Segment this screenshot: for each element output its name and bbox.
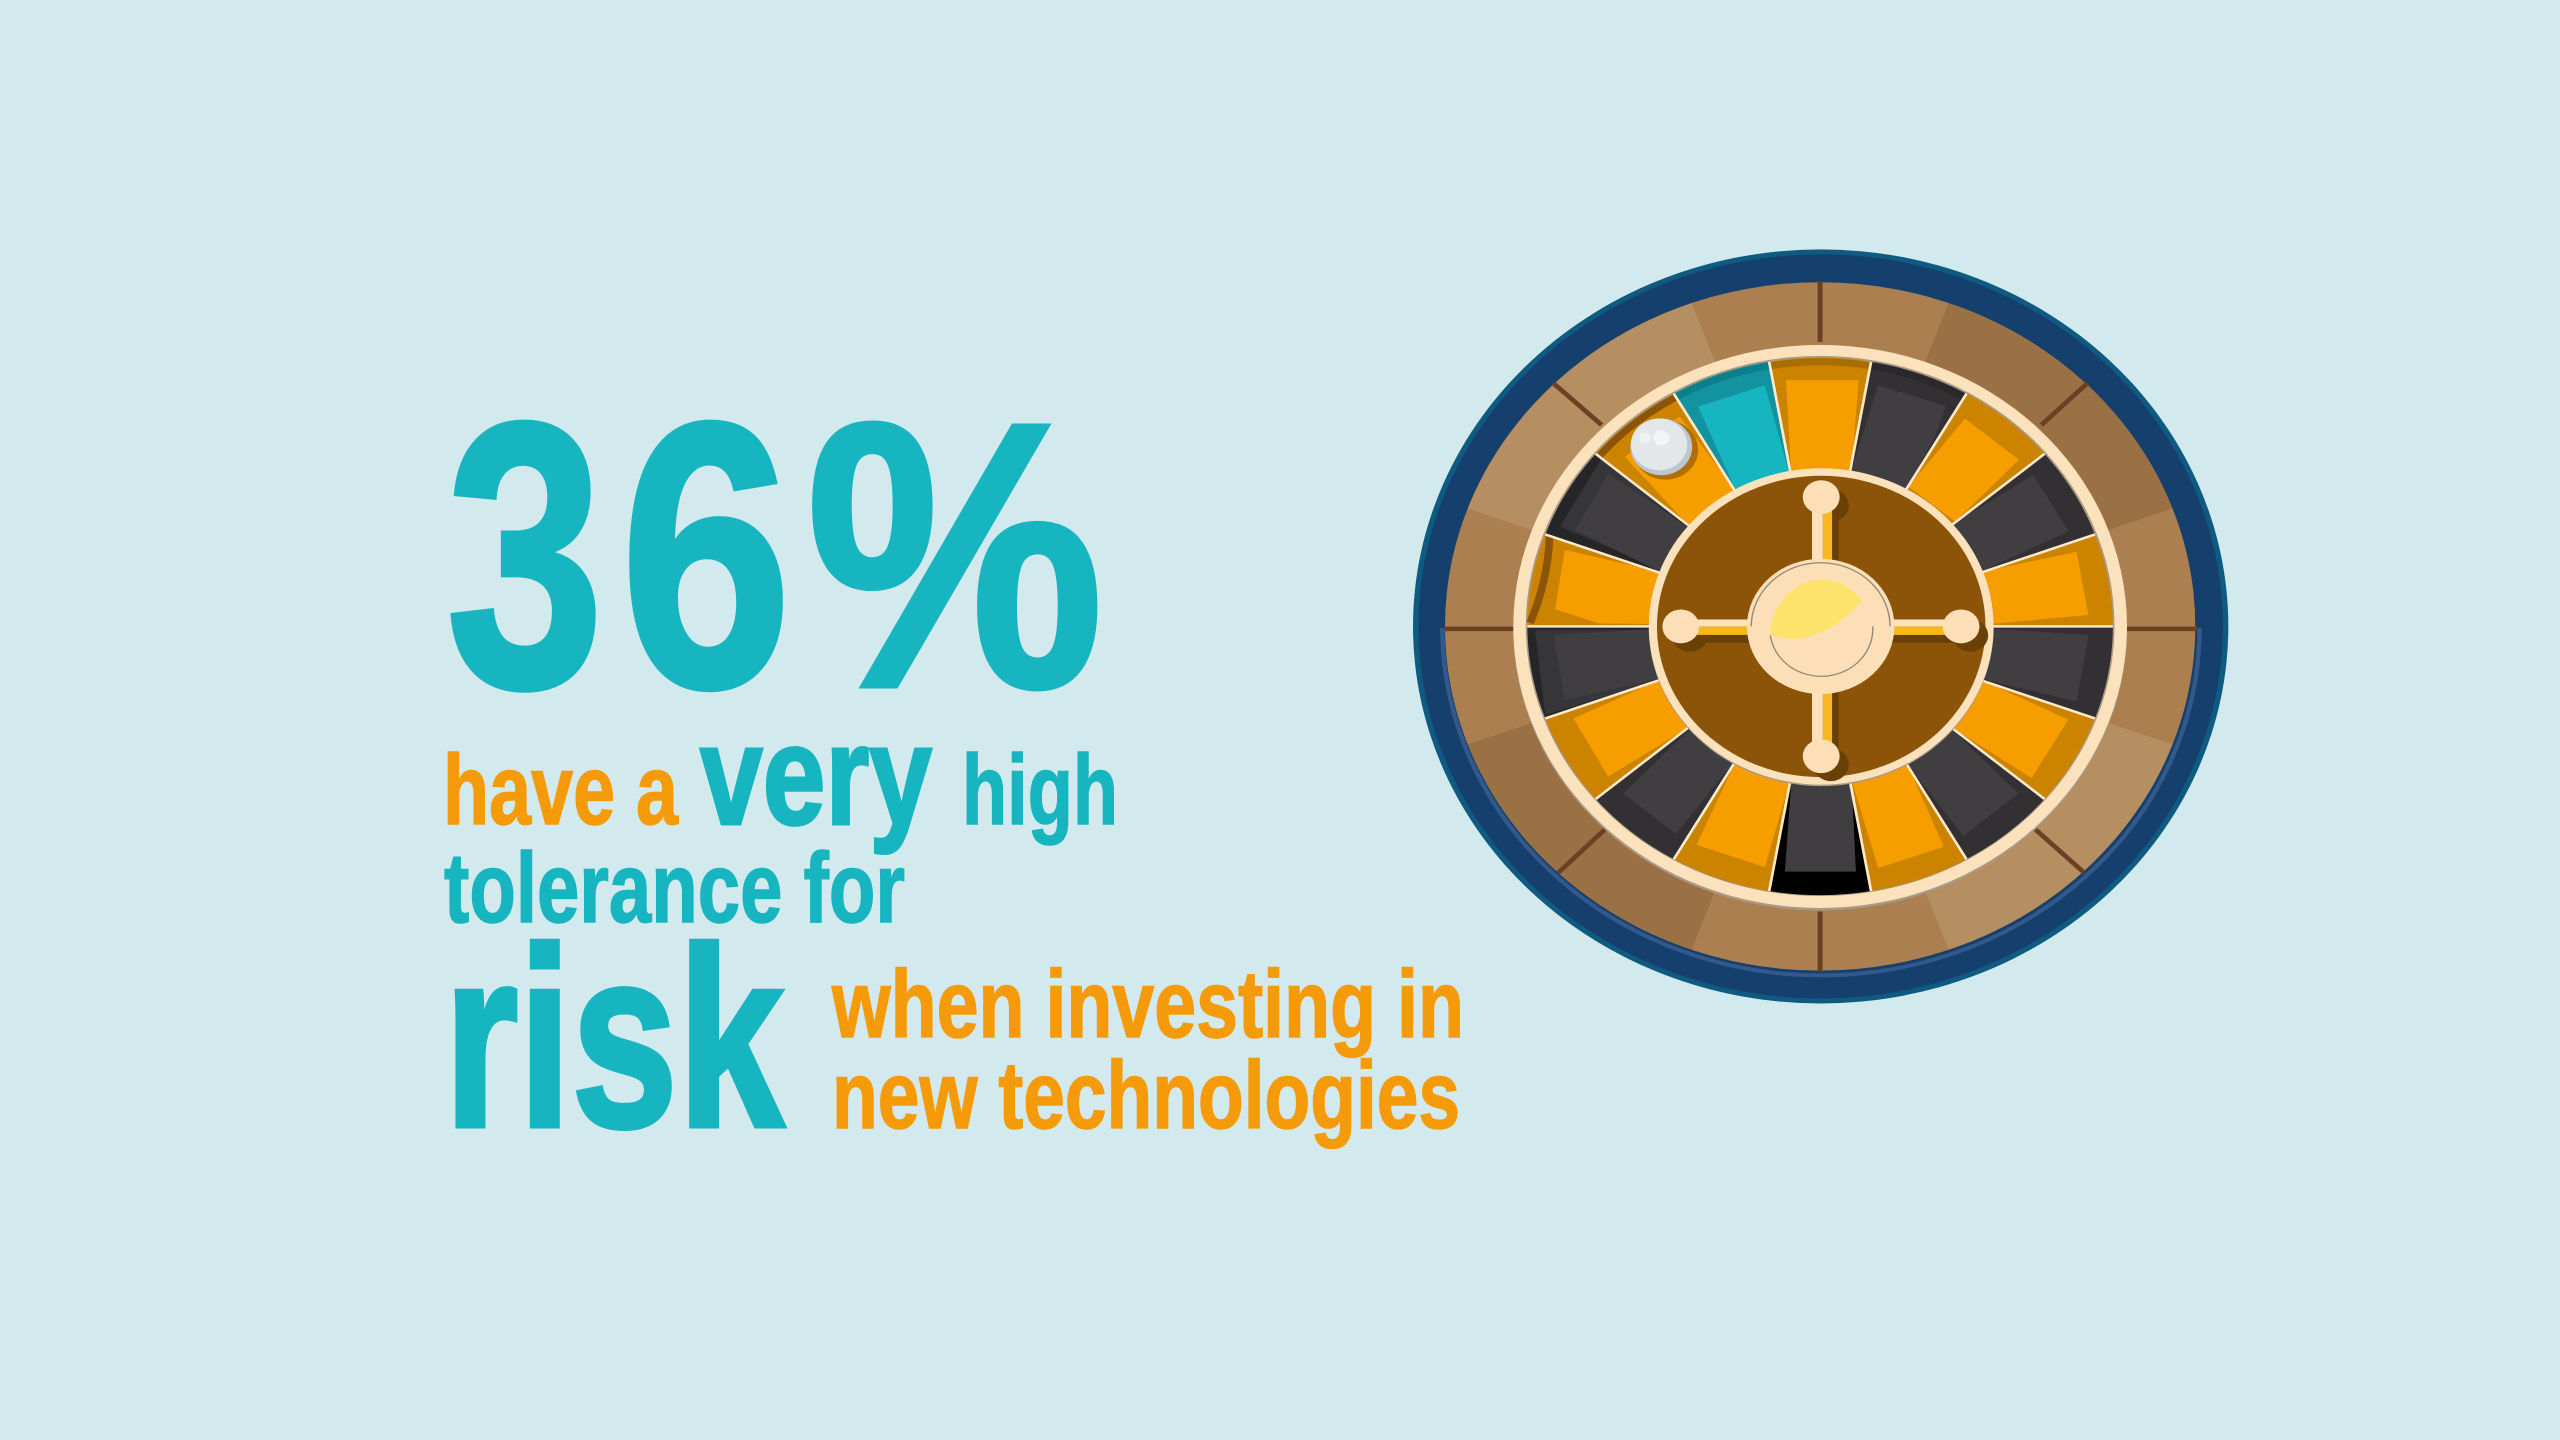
central hub: [1649, 468, 1994, 786]
text: very: very: [700, 696, 932, 855]
spokes and knobs: [1662, 480, 1988, 781]
text: have a: have a: [443, 734, 679, 845]
cream pocket ring: [1513, 345, 2127, 910]
text: high: high: [962, 734, 1118, 845]
big statistic: 36%: [446, 345, 1104, 767]
text: tolerance for: tolerance for: [444, 832, 905, 943]
teal winning pocket: [1698, 385, 1789, 489]
center cap: [1747, 559, 1894, 694]
headline text block: [443, 345, 1464, 1181]
big statistic: 36%: 3: [446, 345, 604, 767]
ball: [1630, 419, 1698, 480]
pockets: [1527, 358, 2113, 895]
wooden ring segments: [1445, 282, 2195, 971]
text: when investing in: when investing in: [831, 951, 1464, 1058]
navy outer rim: [1413, 249, 2228, 1003]
text: new technologies: new technologies: [832, 1042, 1460, 1149]
text: risk: risk: [444, 896, 785, 1181]
big statistic: 36%: %: [806, 345, 1104, 767]
big statistic: 36%: 6: [620, 345, 792, 767]
pocket dividers: [1527, 362, 2113, 891]
roulette wheel illustration: [1413, 249, 2228, 1003]
wood joint lines: [1444, 281, 2197, 972]
